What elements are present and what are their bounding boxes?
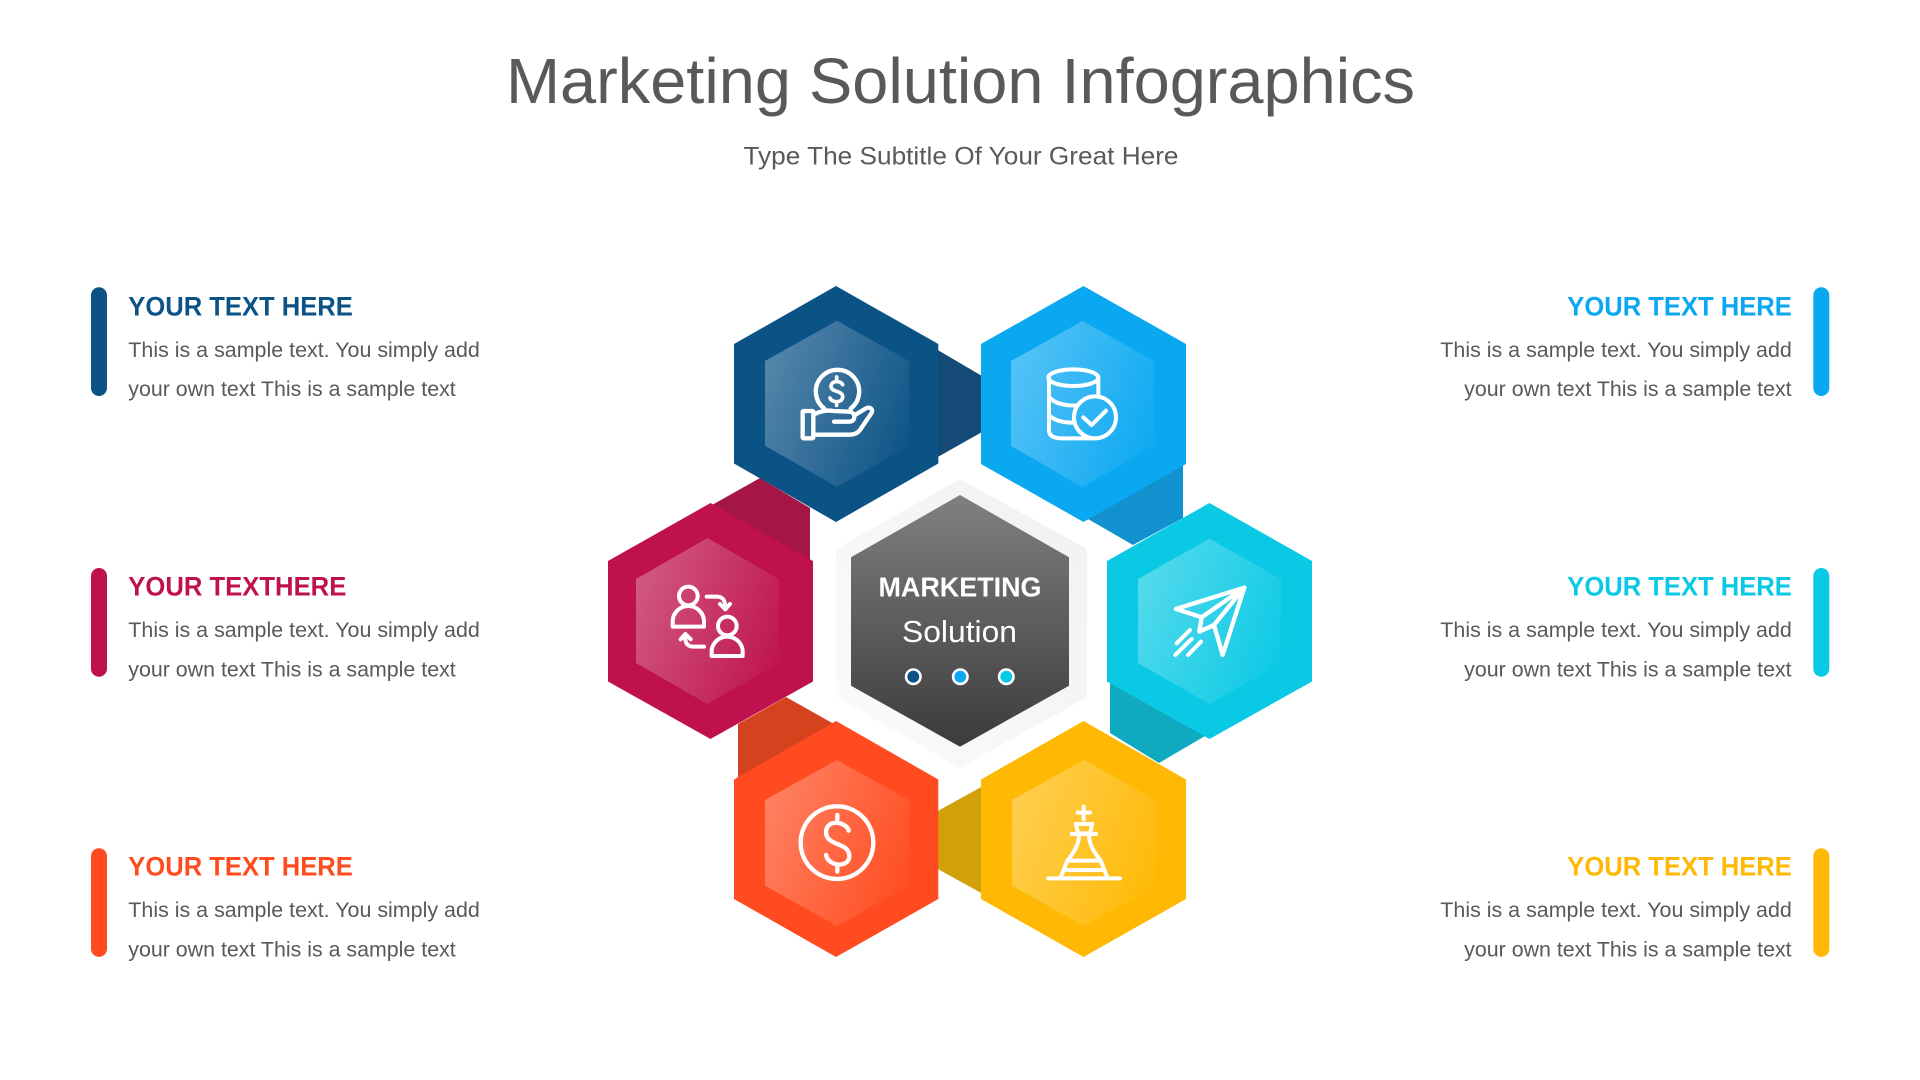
- connector: red to magenta: [738, 697, 834, 780]
- title: Marketing Solution Infographics: [506, 45, 1415, 117]
- subtitle: Type The Subtitle Of Your Great Here: [744, 142, 1178, 170]
- body text: This is a sample text. You simply add: [128, 619, 480, 642]
- panel: right text block cyan: your own text This is a sample text: [1464, 658, 1792, 681]
- panel: right text block blue: your own text This is a sample text: [1464, 378, 1792, 401]
- icon: dollar coin: [801, 806, 873, 879]
- accent bar: [91, 568, 107, 677]
- accent bar: [91, 287, 107, 396]
- panel: right text block blue: [1440, 287, 1829, 401]
- heading: YOUR TEXT HERE: [128, 852, 353, 882]
- icon: database check: [1048, 369, 1116, 438]
- panel: cyan hexagon: [1107, 503, 1312, 739]
- body text: This is a sample text. You simply add: [1440, 339, 1792, 362]
- panel: left text block navy: your own text This is a sample text: [128, 378, 456, 401]
- body text: This is a sample text. You simply add: [128, 899, 480, 922]
- heading: YOUR TEXT HERE: [1567, 572, 1792, 602]
- panel: magenta hexagon: [608, 503, 813, 739]
- heading: YOUR TEXT HERE: [128, 292, 353, 322]
- center subheading: Solution: [902, 614, 1017, 649]
- panel: right text block yellow: your own text This is a sample text: [1464, 939, 1792, 962]
- center heading: MARKETING: [878, 572, 1042, 603]
- indicator dots: [906, 670, 1014, 684]
- body text: This is a sample text. You simply add: [1440, 899, 1792, 922]
- heading: YOUR TEXT HERE: [1567, 852, 1792, 882]
- accent bar: [1813, 568, 1829, 677]
- accent bar: [91, 848, 107, 957]
- accent bar: [1813, 287, 1829, 396]
- icon: paper plane: [1175, 588, 1244, 655]
- heading: YOUR TEXT HERE: [1567, 292, 1792, 322]
- connector: navy to blue: [936, 349, 982, 458]
- panel: right text block cyan: [1440, 568, 1829, 681]
- icon: people exchange: [673, 587, 743, 656]
- panel: left text block navy: [91, 287, 480, 401]
- connector: yellow to red: [936, 786, 983, 894]
- panel: left text block magenta: your own text This is a sample text: [128, 658, 456, 681]
- icon: chess king: [1048, 807, 1120, 878]
- panel: left text block orange: your own text This is a sample text: [128, 939, 456, 962]
- heading: YOUR TEXTHERE: [128, 572, 346, 602]
- panel: left text block orange: [91, 848, 480, 962]
- panel: left text block magenta: [91, 568, 480, 681]
- panel: orange hexagon: [734, 721, 938, 957]
- connector: cyan to yellow: [1110, 678, 1205, 763]
- panel: yellow hexagon: [981, 721, 1186, 957]
- panel: blue hexagon: [981, 286, 1186, 522]
- panel: navy hexagon: [734, 286, 938, 522]
- connector: magenta to navy: [712, 478, 810, 560]
- accent bar: [1813, 848, 1829, 957]
- body text: This is a sample text. You simply add: [128, 339, 480, 362]
- panel: right text block yellow: [1440, 848, 1829, 962]
- body text: This is a sample text. You simply add: [1440, 619, 1792, 642]
- connector: blue to cyan: [1088, 463, 1183, 545]
- icon: hand holding coin: [803, 370, 872, 438]
- panel: center hexagon: [836, 479, 1087, 768]
